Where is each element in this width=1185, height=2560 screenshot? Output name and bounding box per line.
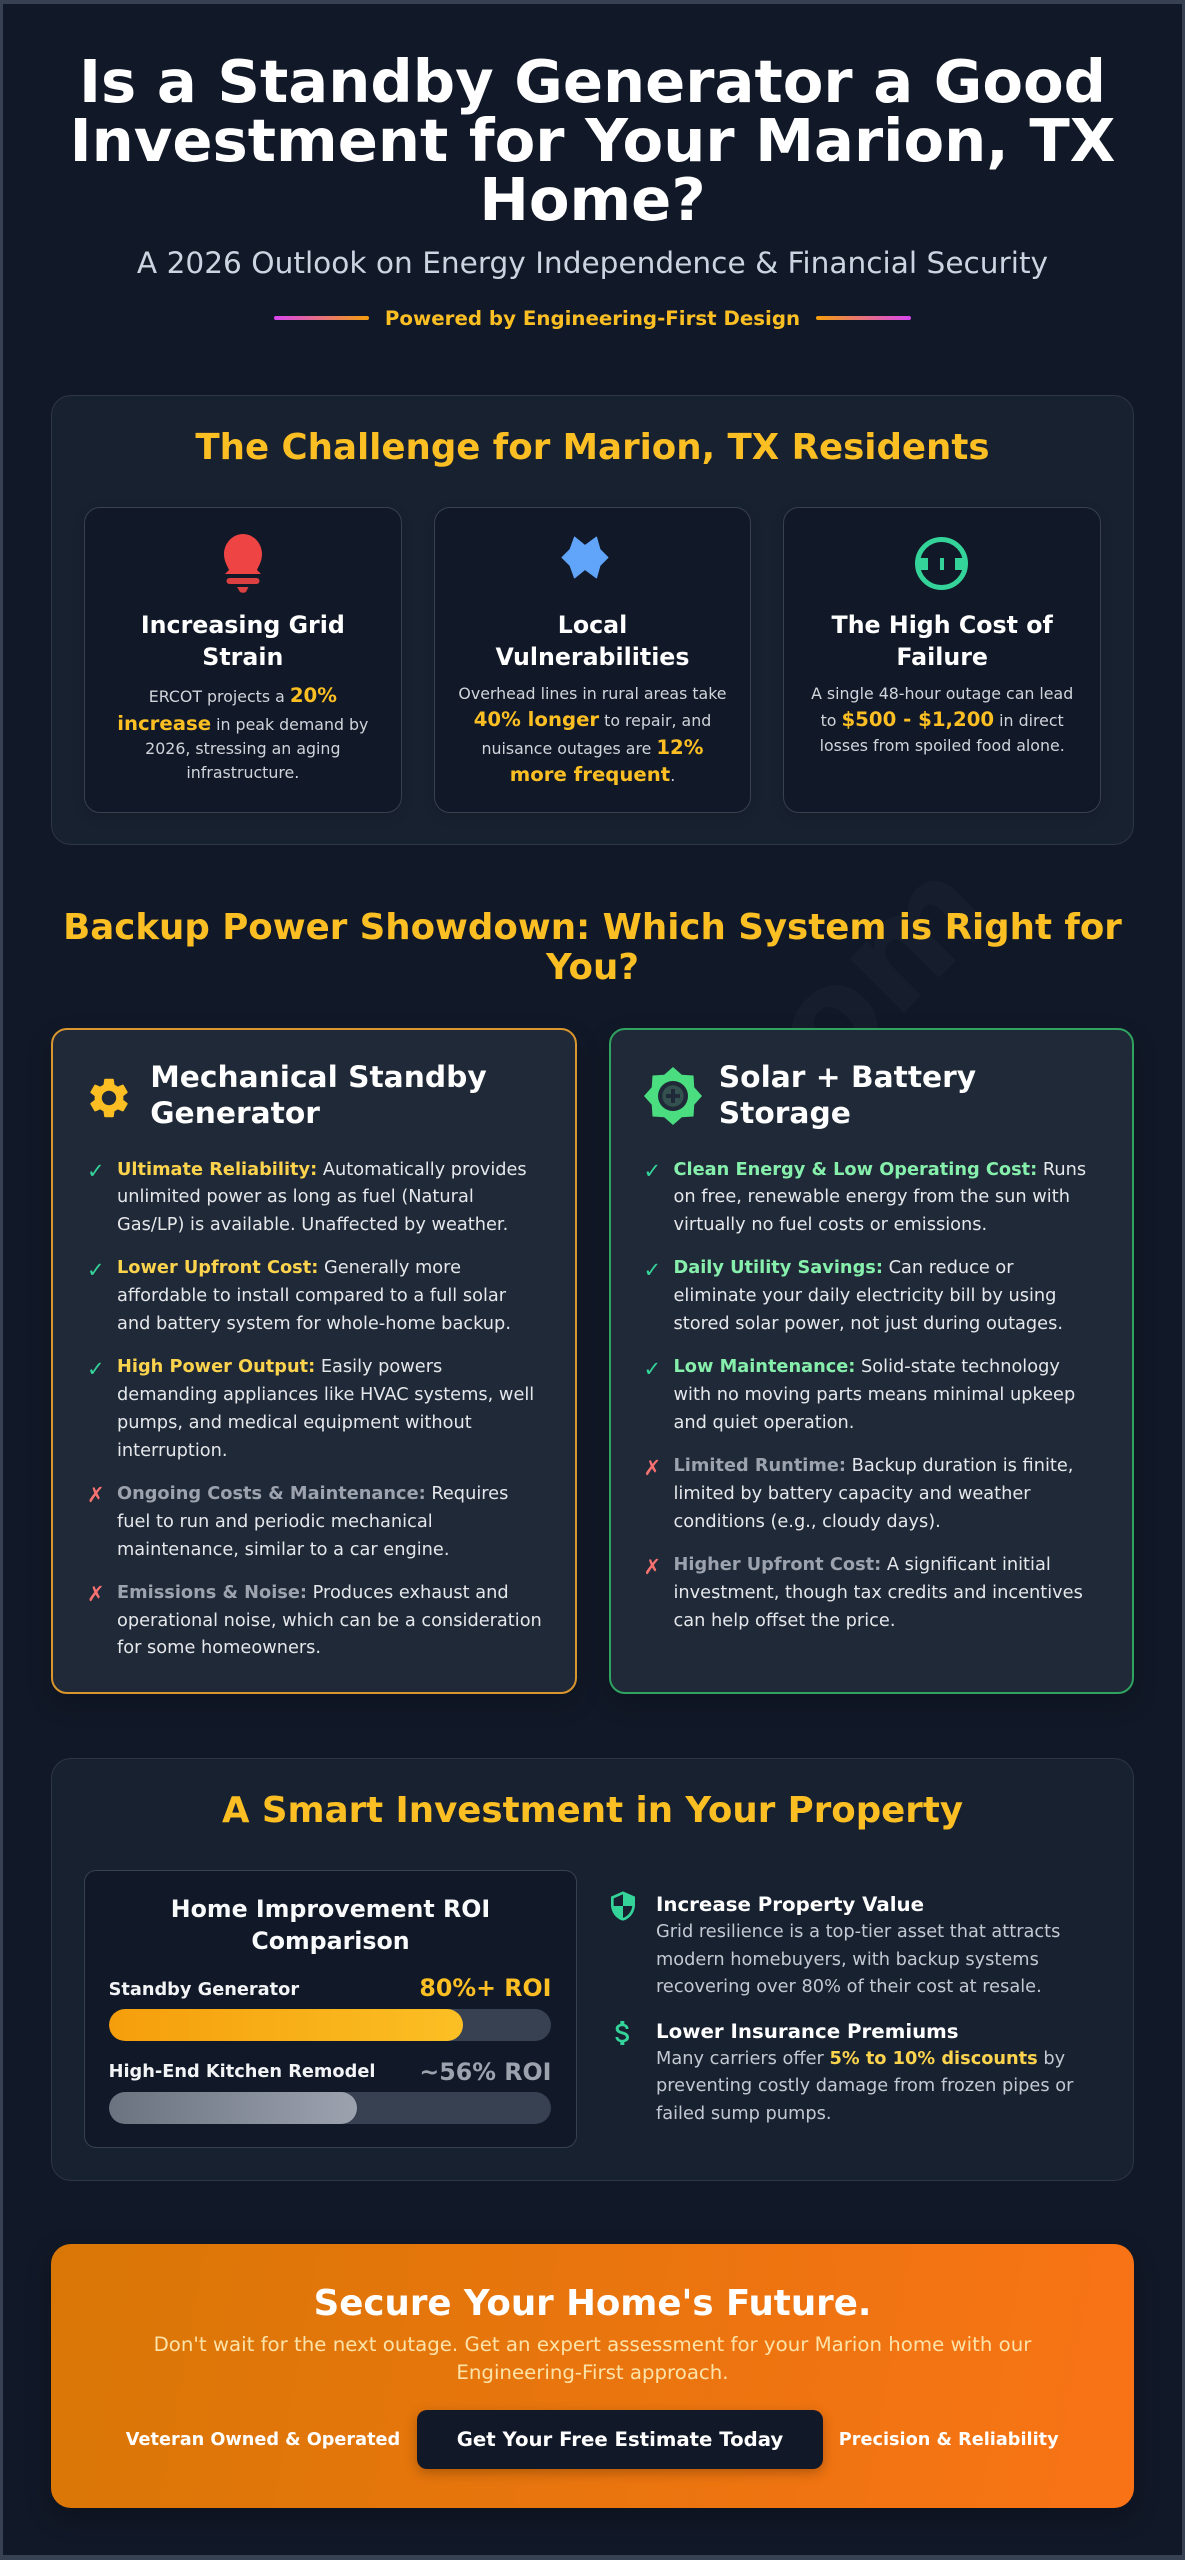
benefit text: Grid resilience is a top-tier asset that attracts <box>656 1922 1060 1942</box>
con: costs: ✗ <box>87 1483 105 1507</box>
card text <box>458 684 727 786</box>
card text: 2026, stressing an aging <box>145 739 340 758</box>
pro: maintenance: Low Maintenance: Solid-state technology <box>674 1357 1060 1377</box>
list: pros and cons <box>87 1159 542 1658</box>
card text <box>811 684 1073 755</box>
con: runtime <box>644 1456 1073 1532</box>
pro: power output: demanding appliances like HVAC systems, well <box>117 1385 534 1405</box>
panel heading: Mechanical Standby <box>150 1060 487 1095</box>
con: upfront cost: ✗ <box>644 1555 661 1579</box>
icon: gear <box>90 1078 128 1118</box>
left gradient rule <box>274 316 369 320</box>
pro: power output: High Power Output: Easily powers <box>117 1357 442 1377</box>
pro: power output: pumps, and medical equipment without <box>117 1413 472 1433</box>
panel: smart investment <box>51 1758 1134 2181</box>
list: pros and cons <box>644 1159 1086 1631</box>
card text <box>117 684 368 782</box>
benefit text: preventing costly damage from frozen pipes or <box>656 2076 1073 2096</box>
benefit title: Increase Property Value <box>656 1893 924 1916</box>
panel: the challenge <box>51 395 1134 845</box>
pro: savings <box>644 1258 1063 1334</box>
pro: power output: interruption. <box>117 1441 228 1461</box>
pro: savings: ✓ <box>644 1258 661 1282</box>
pro: clean energy <box>644 1159 1086 1235</box>
con: emissions: for some homeowners. <box>117 1638 321 1658</box>
title <box>70 47 1115 234</box>
panel heading <box>719 1060 976 1131</box>
pro: power output <box>87 1357 534 1461</box>
panel: mechanical standby generator <box>51 1028 576 1694</box>
card text: to $500 - $1,200 in direct <box>821 708 1064 731</box>
CTA text <box>154 2333 1032 2384</box>
label: standby generator: Standby Generator <box>109 1980 299 2000</box>
card heading <box>141 611 345 671</box>
pro: upfront cost: Lower Upfront Cost: Generally more <box>117 1258 461 1278</box>
CTA text: Engineering-First approach. <box>456 2361 729 2384</box>
card text: increase in peak demand by <box>117 712 368 734</box>
heading: challenge: The Challenge for Marion, TX Residents <box>195 427 990 468</box>
pro: clean energy: Clean Energy & Low Operating Cost: Runs <box>674 1160 1086 1180</box>
card text: ERCOT projects a 20% <box>149 684 337 707</box>
benefit text: modern homebuyers, with backup systems <box>656 1950 1039 1970</box>
card heading <box>832 611 1054 671</box>
title: Investment for Your Marion, TX <box>70 106 1115 175</box>
card: grid strain <box>84 507 402 813</box>
con: emissions: ✗ <box>87 1582 105 1606</box>
con: costs: Ongoing Costs & Maintenance: Requires <box>117 1484 508 1504</box>
panel heading <box>150 1060 487 1131</box>
benefit text: Many carriers offer 5% to 10% discounts by <box>656 2049 1065 2069</box>
button: Get Your Free Estimate Today <box>457 2428 783 2451</box>
panel: call to action <box>51 2244 1134 2508</box>
icon: shield <box>611 1891 635 1921</box>
pro: clean energy: on free, renewable energy from the sun with <box>674 1187 1070 1207</box>
panel heading: Storage <box>719 1096 851 1131</box>
heading: investment: A Smart Investment in Your Property <box>222 1790 963 1831</box>
con: costs: maintenance, similar to a car engine. <box>117 1540 449 1560</box>
chart: ROI comparison <box>84 1870 577 2148</box>
benefit title: Lower Insurance Premiums <box>656 2020 959 2042</box>
heading: showdown: You? <box>546 947 639 988</box>
card heading: The High Cost of <box>832 611 1053 639</box>
pro: savings: Daily Utility Savings: Can reduce or <box>674 1258 1014 1278</box>
panel: solar plus battery <box>608 1028 1134 1694</box>
tagline with gradient rules <box>274 306 911 330</box>
card text: losses from spoiled food alone. <box>820 736 1065 755</box>
card heading: Local <box>558 611 627 639</box>
card text: infrastructure. <box>186 763 299 782</box>
CTA text: Don't wait for the next outage. Get an expert assessment for your Marion home with our <box>154 2333 1031 2356</box>
con: upfront cost: Higher Upfront Cost: A significant initial <box>674 1555 1051 1575</box>
icon: dollar <box>615 2021 629 2045</box>
pro: savings: stored solar power, not just during outages. <box>674 1314 1063 1334</box>
card: cost of failure <box>783 507 1101 813</box>
panel heading: Solar + Battery <box>719 1060 976 1095</box>
icon: outlet ring <box>915 537 968 590</box>
pro: upfront cost <box>87 1258 511 1334</box>
trust label: precision: Precision & Reliability <box>839 2430 1059 2450</box>
chart title: Home Improvement ROI <box>171 1895 490 1923</box>
con: runtime: Limited Runtime: Backup duration is finite, <box>674 1456 1073 1476</box>
card heading: Increasing Grid <box>141 611 345 639</box>
icon: star burst <box>562 536 608 578</box>
con: upfront cost: can help offset the price. <box>674 1611 896 1631</box>
con: runtime: conditions (e.g., cloudy days). <box>674 1512 941 1532</box>
pro: reliability: ✓ <box>87 1159 105 1183</box>
value: 80 percent: 80%+ ROI <box>419 1974 551 2002</box>
heading: showdown <box>63 907 1122 988</box>
icon: sun badge <box>644 1067 702 1125</box>
con: emissions <box>87 1582 542 1658</box>
pro: upfront cost: ✓ <box>87 1258 105 1282</box>
subtitle: A 2026 Outlook on Energy Independence & Financial Security <box>137 246 1048 280</box>
benefit text <box>656 1922 1060 1997</box>
benefit: insurance <box>615 2020 1074 2124</box>
tagline text: Powered by Engineering-First Design <box>385 306 800 330</box>
card text: Overhead lines in rural areas take <box>458 684 727 703</box>
panel heading: Generator <box>150 1096 320 1131</box>
con: upfront cost: investment, though tax credits and incentives <box>674 1583 1083 1603</box>
con: costs <box>87 1483 508 1560</box>
chart title <box>171 1895 490 1954</box>
con: emissions: operational noise, which can be a consideration <box>117 1611 542 1631</box>
pro: maintenance: and quiet operation. <box>674 1413 854 1433</box>
pro: maintenance <box>644 1357 1075 1433</box>
pro: reliability: unlimited power as long as fuel (Natural <box>117 1187 474 1207</box>
pro: maintenance: ✓ <box>644 1357 661 1381</box>
trust label: veteran: Veteran Owned & Operated <box>126 2430 400 2450</box>
pro: savings: eliminate your daily electricity bill by using <box>674 1286 1056 1306</box>
pro: clean energy: ✓ <box>644 1159 661 1183</box>
right gradient rule <box>816 316 911 320</box>
card text: nuisance outages are 12% <box>481 736 703 759</box>
card: vulnerabilities <box>434 507 751 813</box>
benefit: property value <box>611 1891 1060 1997</box>
card text: more frequent. <box>510 763 675 786</box>
bar: kitchen remodel <box>109 2092 551 2124</box>
icon: light bulb <box>224 534 262 593</box>
pro: power output: ✓ <box>87 1357 105 1381</box>
header <box>70 47 1115 330</box>
pro: reliability <box>87 1159 527 1235</box>
con: runtime: ✗ <box>644 1456 661 1480</box>
benefit text <box>656 2049 1074 2124</box>
bar: standby generator <box>109 2009 551 2041</box>
CTA heading: Secure Your Home's Future. <box>314 2283 871 2324</box>
pro: clean energy: virtually no fuel costs or emissions. <box>674 1215 987 1235</box>
value: 56 percent: ~56% ROI <box>419 2058 551 2086</box>
title: Home? <box>479 165 706 234</box>
pro: reliability: Gas/LP) is available. Unaffected by weather. <box>117 1215 508 1235</box>
benefit text: recovering over 80% of their cost at resale. <box>656 1977 1042 1997</box>
pro: upfront cost: affordable to install compared to a full solar <box>117 1286 506 1306</box>
title: Is a Standby Generator a Good <box>79 47 1106 116</box>
con: emissions: Emissions & Noise: Produces exhaust and <box>117 1583 509 1603</box>
card text: 40% longer to repair, and <box>474 708 711 731</box>
con: costs: fuel to run and periodic mechanical <box>117 1512 433 1532</box>
watermark: .com <box>640 827 1023 1209</box>
card heading: Strain <box>202 643 283 671</box>
card heading: Vulnerabilities <box>495 643 689 671</box>
con: runtime: limited by battery capacity and weather <box>674 1484 1031 1504</box>
pro: upfront cost: and battery system for whole-home backup. <box>117 1314 511 1334</box>
benefit text: failed sump pumps. <box>656 2104 831 2124</box>
heading: showdown: Backup Power Showdown: Which System is Right for <box>63 907 1122 948</box>
con: upfront cost <box>644 1555 1083 1631</box>
pro: maintenance: with no moving parts means minimal upkeep <box>674 1385 1075 1405</box>
label: kitchen remodel: High-End Kitchen Remodel <box>109 2062 375 2082</box>
chart title: Comparison <box>251 1926 410 1954</box>
card text: A single 48-hour outage can lead <box>811 684 1073 703</box>
button <box>417 2410 823 2469</box>
pro: reliability: Ultimate Reliability: Automatically provides <box>117 1160 527 1180</box>
card heading: Failure <box>896 643 988 671</box>
card heading <box>495 611 689 671</box>
